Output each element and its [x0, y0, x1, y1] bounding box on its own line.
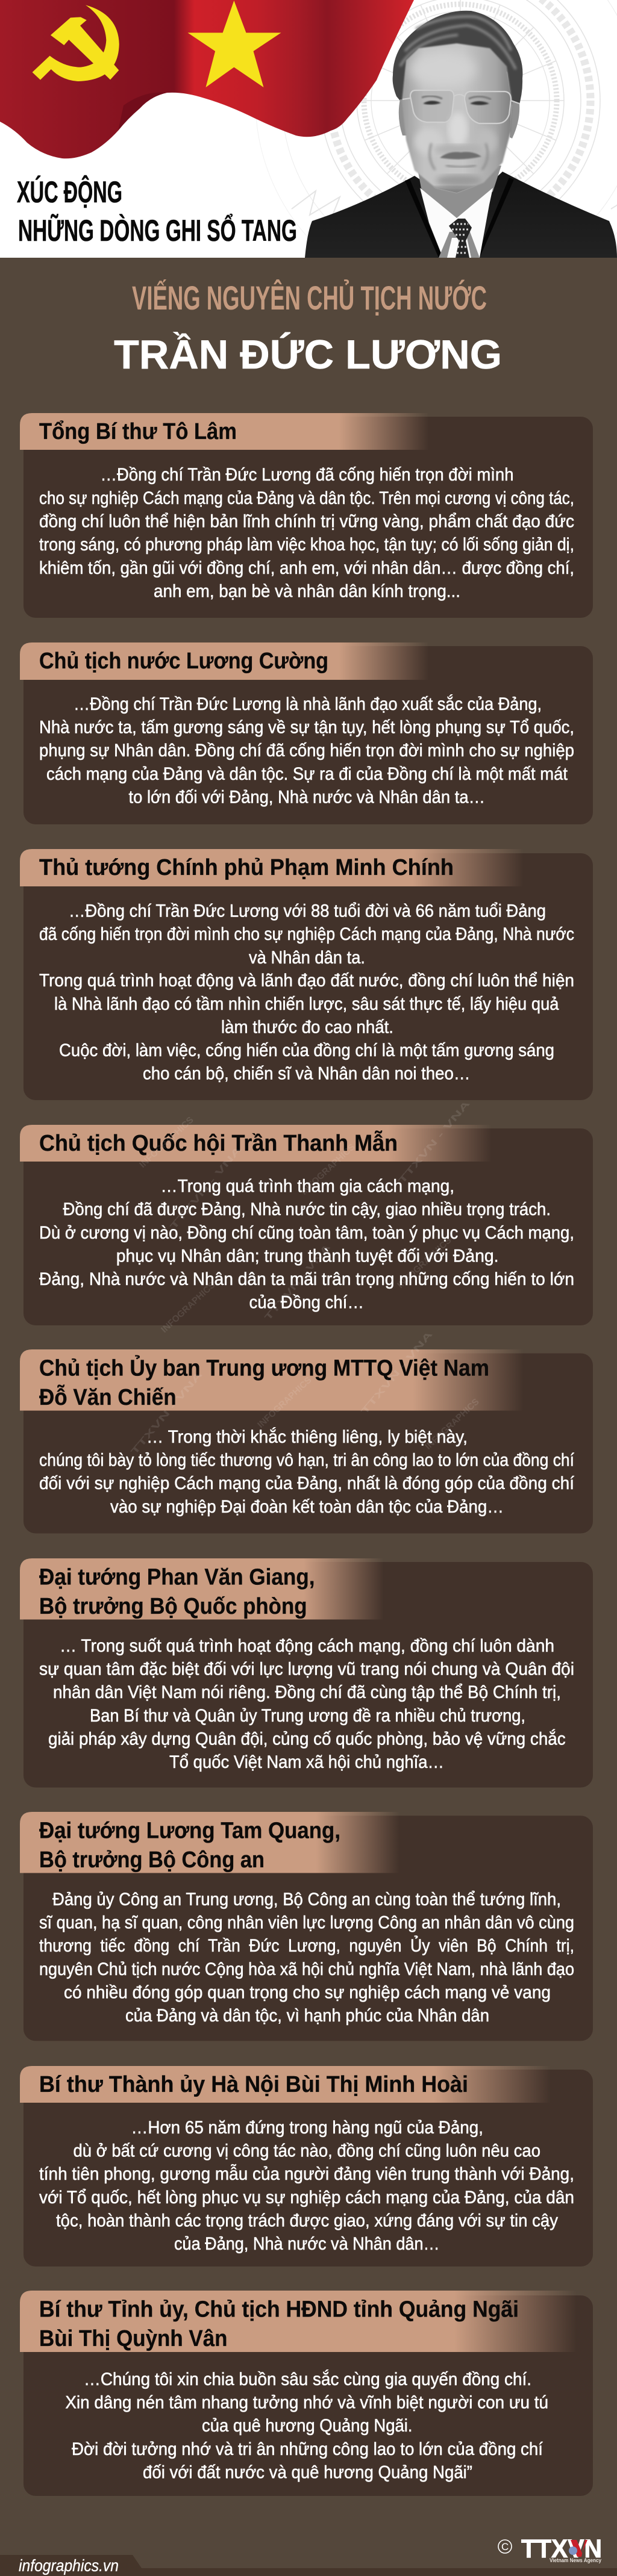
panel: Đỗ Văn Chiến: Chủ tịch Ủy ban Trung ương MTTQ Việt Nam: [39, 1355, 489, 1381]
TTXVN logo: Vietnam News Agency: [550, 2557, 601, 2563]
hair: [393, 11, 522, 108]
panel: Phạm Minh Chính: cho cán bộ, chiến sĩ và Nhân dân noi theo…: [143, 1064, 470, 1084]
header title: [17, 175, 297, 247]
panel: Tô Lâm: Tổng Bí thư Tô Lâm: [39, 419, 237, 444]
panel: Phạm Minh Chính: [20, 849, 593, 1100]
panel: Đỗ Văn Chiến: … Trong thời khắc thiêng liêng, ly biệt này,: [146, 1427, 468, 1447]
panel: Phạm Minh Chính: làm thước đo cao nhất.: [221, 1018, 393, 1037]
panel: Bùi Thị Quỳnh Vân: Đời đời tưởng nhớ và tri ân những công lao to lớn của đồng chí: [72, 2439, 543, 2459]
footer bar: infographics.vn: [19, 2556, 119, 2575]
panel: Đỗ Văn Chiến: đối với sự nghiệp Cách mạng của Đảng, nhất là đóng góp của đồng chí: [39, 1473, 575, 1493]
shirt: [420, 188, 493, 258]
panel: Phan Văn Giang: Ban Bí thư và Quân ủy Trung ương đề ra nhiều chủ trương,: [90, 1706, 525, 1726]
watermarks: [129, 1098, 481, 1457]
main title: TRẦN ĐỨC LƯƠNG: [114, 331, 502, 378]
panel: Lương Cường: …Đồng chí Trần Đức Lương là nhà lãnh đạo xuất sắc của Đảng,: [74, 694, 542, 714]
watermarks: INFOGRAPHICS: [255, 1375, 314, 1430]
ears: [399, 99, 519, 138]
panel: Đỗ Văn Chiến: vào sự nghiệp Đại đoàn kết toàn dân tộc của Đảng…: [110, 1497, 504, 1517]
panel: Đỗ Văn Chiến: Đỗ Văn Chiến: [39, 1384, 177, 1410]
panel: Phạm Minh Chính: Cuộc đời, làm việc, cống hiến của đồng chí là một tấm gương sáng: [59, 1041, 554, 1060]
panel: Phạm Minh Chính: …Đồng chí Trần Đức Lương với 88 tuổi đời và 66 năm tuổi Đảng: [69, 901, 546, 921]
panel: Trần Thanh Mẫn: của Đồng chí…: [249, 1293, 364, 1313]
panel: Phan Văn Giang: Bộ trưởng Bộ Quốc phòng: [39, 1594, 307, 1619]
nostrils: [448, 134, 468, 136]
watermarks: INFOGRAPHICS: [299, 1142, 357, 1197]
panel: Bùi Thị Quỳnh Vân: [20, 2291, 593, 2496]
panel: Trần Thanh Mẫn: phục vụ Nhân dân; trung thành tuyệt đối với Đảng.: [116, 1246, 498, 1266]
panel: Tô Lâm: đồng chí luôn thể hiện bản lĩnh chính trị vững vàng, phẩm chất đạo đức: [39, 512, 574, 532]
panel: Bùi Thị Minh Hoài: [20, 2066, 593, 2266]
panel: Phan Văn Giang: sự quan tâm đặc biệt đối với lực lượng vũ trang nói chung và Quân đội: [39, 1660, 574, 1679]
panel: Trần Thanh Mẫn: Dù ở cương vị nào, Đồng chí cũng toàn tâm, toàn ý phục vụ Cách mạng,: [39, 1223, 574, 1243]
watermarks: TTXVN - VNA: [129, 1369, 205, 1457]
panel: Lương Cường: [20, 642, 593, 824]
national star: [188, 1, 281, 87]
panel: Lương Cường: cách mạng của Đảng và dân tộc. Sự ra đi của Đồng chí là một mất mát: [46, 764, 568, 784]
eyes: [423, 101, 441, 105]
panel: Phạm Minh Chính: và Nhân dân ta.: [249, 948, 365, 968]
panel: Lương Tam Quang: có nhiều đóng góp quan trọng cho sự nghiệp cách mạng vẻ vang: [64, 1982, 551, 2003]
panel: Đỗ Văn Chiến: [20, 1349, 593, 1533]
header banner: [0, 0, 617, 258]
panel: Bùi Thị Minh Hoài: …Hơn 65 năm đứng trong hàng ngũ của Đảng,: [131, 2118, 483, 2138]
watermarks: TTXVN - VNA: [263, 1242, 333, 1323]
panel: Bùi Thị Minh Hoài: Bí thư Thành ủy Hà Nội Bùi Thị Minh Hoài: [39, 2072, 468, 2097]
neck: [417, 166, 501, 218]
panel: Lương Tam Quang: Đại tướng Lương Tam Quang,: [39, 1818, 340, 1844]
flag: [0, 0, 414, 158]
panel: Trần Thanh Mẫn: Đồng chí đã được Đảng, Nhà nước tin cậy, giao nhiều trọng trách.: [63, 1199, 551, 1219]
panel: Bùi Thị Minh Hoài: tính tiên phong, gương mẫu của người đảng viên trung thành với Đảng,: [39, 2164, 574, 2184]
panel: Bùi Thị Quỳnh Vân: của quê hương Quảng Ngãi.: [202, 2416, 412, 2436]
panel: Trần Thanh Mẫn: [20, 1125, 593, 1325]
watermarks: TTXVN - VNA: [168, 1144, 244, 1232]
panel: Phan Văn Giang: giải pháp xây dựng Quân đội, củng cố quốc phòng, bảo vệ vững chắc: [48, 1729, 566, 1749]
panel: Tô Lâm: khiêm tốn, gần gũi với đồng chí, anh em, với nhân dân… được đồng chí,: [39, 558, 574, 578]
panel: Phạm Minh Chính: Trong quá trình hoạt động và lãnh đạo đất nước, đồng chí luôn thể hiện: [39, 971, 574, 991]
watermarks: INFOGRAPHICS: [159, 1280, 218, 1335]
watermarks: TTXVN - VNA: [359, 1329, 435, 1417]
header title: XÚC ĐỘNG: [17, 175, 122, 209]
panel: Bùi Thị Quỳnh Vân: …Chúng tôi xin chia buồn sâu sắc cùng gia quyến đồng chí.: [84, 2369, 531, 2389]
watermarks: INFOGRAPHICS: [395, 1235, 454, 1290]
panel: Lương Tam Quang: Đảng ủy Công an Trung ương, Bộ Công an cùng toàn thể tướng lĩnh,: [52, 1890, 561, 1909]
header title: NHỮNG DÒNG GHI SỔ TANG: [18, 213, 297, 247]
panel: Tô Lâm: …Đồng chí Trần Đức Lương đã cống hiến trọn đời mình: [100, 465, 513, 485]
watermarks: INFOGRAPHICS: [423, 1396, 481, 1452]
panel: Bùi Thị Quỳnh Vân: Bí thư Tỉnh ủy, Chủ tịch HĐND tỉnh Quảng Ngãi: [39, 2297, 519, 2322]
panel: Phạm Minh Chính: Thủ tướng Chính phủ Phạm Minh Chính: [39, 855, 454, 880]
watermarks: TTXVN - VNA: [396, 1098, 472, 1186]
party hammer and sickle: [33, 5, 119, 81]
panel: Lương Tam Quang: [20, 1812, 593, 2041]
mouth: [440, 152, 481, 160]
panel: Lương Cường: Chủ tịch nước Lương Cường: [39, 649, 328, 674]
panel: Trần Thanh Mẫn: …Trong quá trình tham gia cách mạng,: [160, 1177, 454, 1196]
panel: Lương Cường: Nhà nước ta, tấm gương sáng về sự tận tụy, hết lòng phụng sự Tổ quốc,: [39, 718, 574, 738]
face: [402, 43, 512, 193]
panel: Phan Văn Giang: [20, 1558, 593, 1787]
panel: Bùi Thị Minh Hoài: dù ở bất cứ cương vị công tác nào, đồng chí cũng luôn nêu cao: [74, 2141, 540, 2161]
footer bar: [0, 2555, 617, 2576]
panel: Trần Thanh Mẫn: Chủ tịch Quốc hội Trần Thanh Mẫn: [39, 1130, 398, 1156]
panel: Trần Thanh Mẫn: Đảng, Nhà nước và Nhân dân ta mãi trân trọng những cống hiến to lớn: [39, 1269, 574, 1289]
panel: Phan Văn Giang: Đại tướng Phan Văn Giang,: [39, 1564, 315, 1590]
panel: Phan Văn Giang: … Trong suốt quá trình hoạt động cách mạng, đồng chí luôn dành: [60, 1636, 554, 1656]
panel: Lương Cường: phụng sự Nhân dân. Đồng chí đã cống hiến trọn đời mình cho sự nghiệp: [39, 741, 574, 761]
portrait: [305, 11, 617, 258]
TTXVN logo: TTXVN: [521, 2534, 602, 2563]
panel: Bùi Thị Quỳnh Vân: Bùi Thị Quỳnh Vân: [39, 2326, 228, 2351]
panel: Bùi Thị Minh Hoài: với Tổ quốc, hết lòng phục vụ sự nghiệp cách mạng của Đảng, của dân: [39, 2188, 574, 2207]
suit: [305, 172, 617, 258]
panel: Phan Văn Giang: Tổ quốc Việt Nam xã hội chủ nghĩa…: [169, 1752, 444, 1772]
panel: Tô Lâm: anh em, bạn bè và nhân dân kính trọng...: [154, 582, 460, 602]
watermarks: INFOGRAPHICS: [137, 1115, 196, 1170]
panel: Bùi Thị Minh Hoài: của Đảng, Nhà nước và Nhân dân…: [174, 2234, 440, 2254]
panel: Lương Cường: to lớn đối với Đảng, Nhà nước và Nhân dân ta…: [129, 788, 485, 807]
panel: Bùi Thị Quỳnh Vân: Xin dâng nén tâm nhang tưởng nhớ và vĩnh biệt người con ưu tú: [65, 2393, 548, 2413]
glasses: [402, 90, 519, 123]
panel: Phan Văn Giang: nhân dân Việt Nam nói riêng. Đồng chí đã cùng tập thể Bộ Chính trị,: [53, 1682, 561, 1702]
panel: Phạm Minh Chính: là Nhà lãnh đạo có tầm nhìn chiến lược, sâu sát thực tế, lấy hiệu quả: [54, 994, 559, 1014]
tie: [449, 219, 472, 258]
panel: Tô Lâm: [20, 413, 593, 618]
panel: Lương Tam Quang: sĩ quan, hạ sĩ quan, công nhân viên lực lượng Công an nhân dân vô cùng: [39, 1913, 574, 1933]
panel: Lương Tam Quang: nguyên Chủ tịch nước Cộng hòa xã hội chủ nghĩa Việt Nam, nhà lãnh đạo: [39, 1959, 574, 1979]
main title: [114, 279, 502, 378]
bronze drum emblem watermark: [256, 0, 617, 237]
panel: Bùi Thị Minh Hoài: tộc, hoàn thành các trọng trách được giao, xứng đáng với sự tin cậy: [56, 2211, 558, 2230]
panel: Lương Tam Quang: của Đảng và dân tộc, vì hạnh phúc của Nhân dân: [125, 2006, 489, 2026]
TTXVN logo: C: [501, 2541, 509, 2553]
panel: Bùi Thị Quỳnh Vân: đối với đất nước và quê hương Quảng Ngãi”: [143, 2463, 472, 2482]
flag fold: [118, 92, 167, 131]
panel: Lương Tam Quang: Bộ trưởng Bộ Công an: [39, 1847, 265, 1873]
